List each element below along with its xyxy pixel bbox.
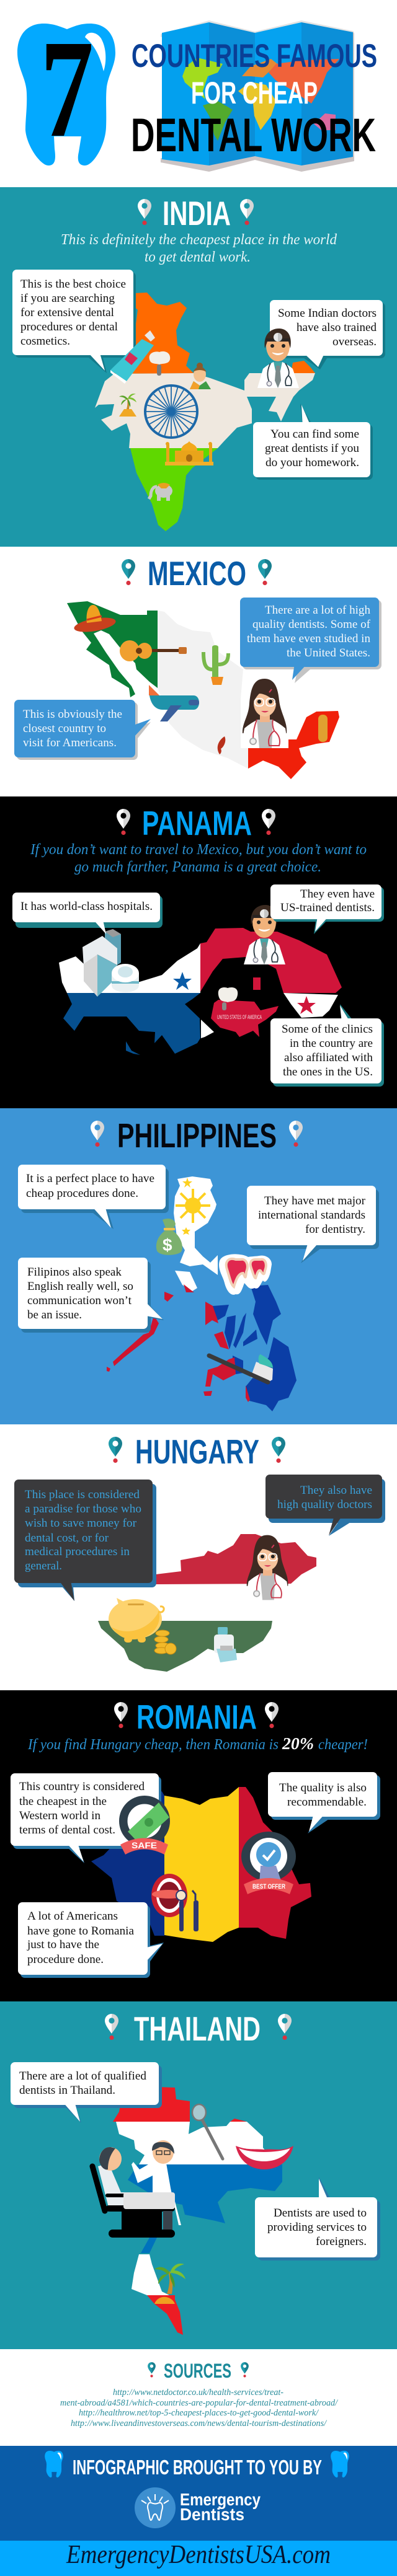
- icon: palm tree: [154, 2264, 185, 2304]
- icon: dental tools: [176, 1890, 198, 1931]
- icon: right pin: [258, 559, 272, 585]
- bubble: do your homework: great dentists if you: [265, 442, 360, 455]
- bubble: filipinos speak English: English really well, so: [27, 1280, 133, 1293]
- bubble: best choice: for extensive dental: [20, 306, 114, 319]
- bubble: filipinos speak English: communication won’t: [27, 1294, 132, 1307]
- source links: http://www.netdoctor.co.uk/health-services/treat-: [113, 2388, 283, 2397]
- icon: red teeth: [219, 1254, 272, 1295]
- bubble: best choice: procedures or dental: [20, 320, 118, 333]
- icon: toothbrush: [209, 1354, 273, 1382]
- bubble: services to foreigners: [255, 2177, 380, 2261]
- bubble: quality doctors: [265, 1475, 385, 1536]
- bubble: quality recommendable: [268, 1772, 380, 1833]
- bubble: US-trained dentists: US-trained dentists.: [280, 901, 375, 914]
- icon: dental implant: [149, 351, 170, 376]
- icon: mouth with tongue: [151, 1874, 187, 1917]
- heading: Mexico: MEXICO: [148, 554, 246, 593]
- bubble: filipinos speak English: [18, 1258, 164, 1333]
- bubble: do your homework: You can find some: [270, 428, 359, 441]
- heading: India: INDIA: [163, 194, 231, 232]
- bubble: high quality dentists: them have even studied in: [247, 632, 371, 645]
- bubble: closest country: This is obviously the: [23, 708, 122, 721]
- bubble: trained overseas: overseas.: [332, 335, 377, 348]
- bubble: perfect place: cheap procedures done.: [26, 1187, 138, 1200]
- panel: hungary: [0, 1424, 397, 1690]
- icon: burrito: [318, 715, 328, 742]
- source links: [60, 2388, 339, 2428]
- icon: right pin: [272, 1437, 285, 1463]
- bubble: services to foreigners: Dentists are used to: [274, 2207, 367, 2220]
- heading: Panama: PANAMA: [142, 804, 252, 842]
- icon: left pin: [138, 199, 151, 225]
- icon: philippine sun and stars: [176, 1178, 210, 1235]
- bubble: qualified dentists: dentists in Thailand.: [19, 2084, 115, 2097]
- icon: right pin: [278, 2014, 292, 2040]
- icon: left pin: [148, 2362, 156, 2377]
- bubble: best choice: cosmetics.: [20, 335, 70, 348]
- icon: left pin: [109, 1437, 122, 1463]
- bubble: do your homework: do your homework.: [265, 456, 359, 469]
- icon: toothpaste: [110, 330, 155, 384]
- map of Panama in flag colours: [59, 928, 342, 1055]
- ashoka chakra wheel: [145, 386, 197, 438]
- subtitle: [61, 232, 337, 265]
- bubble: international standards: international standards: [258, 1209, 365, 1222]
- bubble: Americans: [18, 1902, 164, 1978]
- bubble: closest country: [14, 700, 151, 760]
- heading: Sources: SOURCES: [164, 2360, 231, 2382]
- bubble: international standards: [247, 1186, 379, 1263]
- panel: thailand: [0, 2001, 397, 2349]
- icon: left pin: [122, 559, 135, 585]
- bubble: cheapest western: Western world in: [19, 1809, 101, 1822]
- bubble: paradise: [14, 1480, 156, 1601]
- bubble: trained overseas: have also trained: [297, 321, 377, 334]
- bubble: affiliated clinics: also affiliated with: [284, 1051, 373, 1064]
- panel: website url: [0, 2541, 397, 2576]
- icon: female doctor: [245, 1535, 290, 1600]
- icon: right pin: [265, 1702, 279, 1728]
- icon: male doctor: [257, 329, 299, 388]
- panel: header: [0, 0, 397, 187]
- icon: chili: [218, 736, 225, 754]
- bubble: paradise: medical procedures in: [25, 1545, 130, 1558]
- heading: Romania: ROMANIA: [136, 1698, 257, 1736]
- title line 2: FOR CHEAP: [191, 76, 318, 110]
- bubble: high quality dentists: the United States.: [287, 646, 370, 659]
- logo: emergency dentists: [135, 2487, 261, 2528]
- map of India in flag colours: [95, 293, 315, 531]
- panel: romania: [0, 1690, 397, 2001]
- red star: [297, 996, 316, 1014]
- subtitle: [27, 1734, 368, 1753]
- icon: elephant: [149, 483, 172, 501]
- icon: piggy bank: [109, 1598, 164, 1643]
- bubble: closest country: visit for Americans.: [23, 736, 117, 749]
- icon: right pin: [241, 2362, 249, 2377]
- icon: plane: [149, 685, 199, 721]
- icon: money bag: [156, 1219, 182, 1255]
- icon: right pin: [262, 809, 275, 835]
- icon: dental implant: [218, 987, 238, 1010]
- subtitle: cheaper!: [318, 1737, 368, 1753]
- icon: right tooth: [331, 2451, 349, 2477]
- subtitle: to get dental work.: [145, 249, 251, 265]
- subtitle: If you don’t want to travel to Mexico, but you don’t want to: [30, 842, 367, 858]
- badge: best offer: BEST OFFER: [252, 1883, 285, 1890]
- subtitle: go much farther, Panama is a great choice.: [74, 859, 321, 875]
- bubble: paradise: wish to save money for: [25, 1517, 137, 1530]
- bubble: affiliated clinics: in the country are: [290, 1037, 373, 1050]
- bubble: quality recommendable: The quality is also: [279, 1781, 367, 1794]
- heading: Philippines: PHILIPPINES: [117, 1116, 277, 1155]
- bubble: affiliated clinics: [270, 1004, 384, 1087]
- icon: mouthwash bottle: [214, 1627, 237, 1662]
- logo: emergency dentists: Emergency: [180, 2490, 261, 2509]
- bubble: services to foreigners: providing services to: [267, 2221, 367, 2234]
- bubble: high quality dentists: There are a lot of high: [265, 604, 371, 617]
- subtitle: If you find Hungary cheap, then Romania is: [27, 1737, 279, 1753]
- bubble: closest country: closest country to: [23, 722, 106, 735]
- panel: brought to you by: [0, 2446, 397, 2541]
- map of Romania in flag colours: [91, 1787, 311, 1942]
- icon: right pin: [240, 199, 254, 225]
- bubble: quality recommendable: recommendable.: [287, 1796, 367, 1809]
- icon: hospital building: [83, 929, 139, 997]
- icon: male doctor: [244, 905, 285, 964]
- blue star: [173, 972, 192, 990]
- bubble: Americans: A lot of Americans: [27, 1910, 118, 1923]
- bubble: quality doctors: They also have: [300, 1484, 372, 1497]
- bubble: world-class hospitals: [12, 893, 163, 934]
- subtitle: [30, 842, 367, 875]
- number seven: 7: [40, 11, 94, 166]
- bubble: services to foreigners: foreigners.: [316, 2235, 367, 2248]
- subtitle: This is definitely the cheapest place in the world: [61, 232, 337, 248]
- bubble: international standards: for dentistry.: [305, 1223, 365, 1236]
- bubble: Americans: have gone to Romania: [27, 1925, 135, 1938]
- bubble: Americans: procedure done.: [27, 1953, 104, 1966]
- source links: http://healthrow.net/top-5-cheapest-places-to-get-good-dental-work/: [79, 2408, 319, 2418]
- icon: left pin: [105, 2014, 118, 2040]
- bubble: trained overseas: Some Indian doctors: [278, 307, 377, 320]
- icon: tooth: [17, 24, 115, 165]
- icon: folded world map: [161, 20, 354, 172]
- badge: safe: SAFE: [132, 1840, 157, 1850]
- map of the Philippines in flag colours: [107, 1176, 297, 1411]
- heading: Thailand: THAILAND: [134, 2009, 261, 2048]
- bubble: filipinos speak English: be an issue.: [27, 1308, 82, 1321]
- source links: ment-abroad/a4581/which-countries-are-popular-for-dental-treatment-abroad/: [60, 2398, 339, 2408]
- bubble: international standards: They have met major: [264, 1194, 366, 1207]
- icon: left tooth: [45, 2451, 63, 2477]
- icon: guitar: [120, 640, 187, 661]
- panel: panama: [0, 796, 397, 1108]
- icon: right pin: [289, 1121, 303, 1147]
- map of Mexico in flag colours: [67, 601, 339, 779]
- subtitle: 20%: [282, 1734, 314, 1753]
- bubble: qualified dentists: [11, 2062, 162, 2123]
- icon: left pin: [114, 1702, 128, 1728]
- bubble: cheapest western: This country is considered: [19, 1780, 145, 1793]
- bubble: do your homework: [253, 404, 373, 480]
- map of United States: [211, 1000, 279, 1037]
- icon: cactus: [203, 645, 228, 685]
- icon: taj mahal: [165, 441, 213, 465]
- icon: coins: [154, 1630, 176, 1654]
- icon: dentist and patient in chair: [92, 2140, 181, 2238]
- bubble: perfect place: It is a perfect place to have: [26, 1172, 154, 1185]
- panel: mexico: [0, 547, 397, 796]
- bubble: quality doctors: high quality doctors: [277, 1498, 372, 1511]
- icon: smile lips: [236, 2146, 293, 2169]
- icon: left pin: [117, 809, 130, 835]
- badge: best offer: [241, 1832, 296, 1894]
- map of United States: UNITED STATES OF AMERICA: [217, 1014, 262, 1021]
- bubble: affiliated clinics: Some of the clinics: [282, 1023, 373, 1036]
- icon: money bag: $: [163, 1235, 172, 1255]
- map of Hungary in flag colours: [98, 1534, 316, 1672]
- bubble: cheapest western: [11, 1773, 161, 1863]
- icon: palm tree: [119, 394, 136, 417]
- icon: female doctor: [241, 679, 288, 748]
- bubble: best choice: [12, 270, 136, 373]
- map of Thailand in flag colours: [113, 2087, 282, 2335]
- badge: safe: [119, 1796, 170, 1855]
- bubble: US-trained dentists: [270, 884, 384, 934]
- bubble: world-class hospitals: It has world-class hospitals.: [20, 900, 153, 913]
- website url: EmergencyDentistsUSA.com: [66, 2541, 331, 2569]
- bubble: high quality dentists: quality dentists. Some of: [252, 618, 371, 631]
- bubble: qualified dentists: There are a lot of qualified: [19, 2070, 147, 2083]
- bubble: cheapest western: terms of dental cost.: [19, 1824, 115, 1837]
- source links: http://www.liveandinvestoverseas.com/news/dental-tourism-destinations/: [71, 2419, 328, 2428]
- bubble: paradise: a paradise for those who: [25, 1502, 141, 1515]
- icon: left pin: [91, 1121, 104, 1147]
- icon: sombrero: [73, 605, 117, 635]
- bubble: best choice: This is the best choice: [20, 278, 126, 291]
- bubble: perfect place: [18, 1165, 169, 1229]
- bubble: paradise: general.: [25, 1559, 62, 1573]
- panel: sources: [0, 2349, 397, 2446]
- panel: philippines: [0, 1108, 397, 1424]
- logo: emergency dentists: Dentists: [180, 2505, 244, 2524]
- heading: Hungary: HUNGARY: [135, 1432, 259, 1471]
- panel: india: [0, 187, 397, 547]
- bubble: affiliated clinics: the ones in the US.: [283, 1065, 373, 1078]
- bubble: cheapest western: the cheapest in the: [19, 1795, 107, 1808]
- bubble: Americans: just to have the: [27, 1938, 99, 1951]
- icon: dental mirror: [192, 2104, 223, 2159]
- bubble: trained overseas: [270, 300, 385, 369]
- bubble: paradise: dental cost, or for: [25, 1532, 109, 1545]
- bubble: US-trained dentists: They even have: [300, 888, 375, 901]
- bubble: paradise: This place is considered: [25, 1488, 140, 1501]
- bubble: filipinos speak English: Filipinos also speak: [27, 1266, 122, 1279]
- bubble: best choice: if you are searching: [20, 292, 115, 305]
- bubble: high quality dentists: [240, 598, 381, 683]
- icon: indian woman: [190, 363, 211, 389]
